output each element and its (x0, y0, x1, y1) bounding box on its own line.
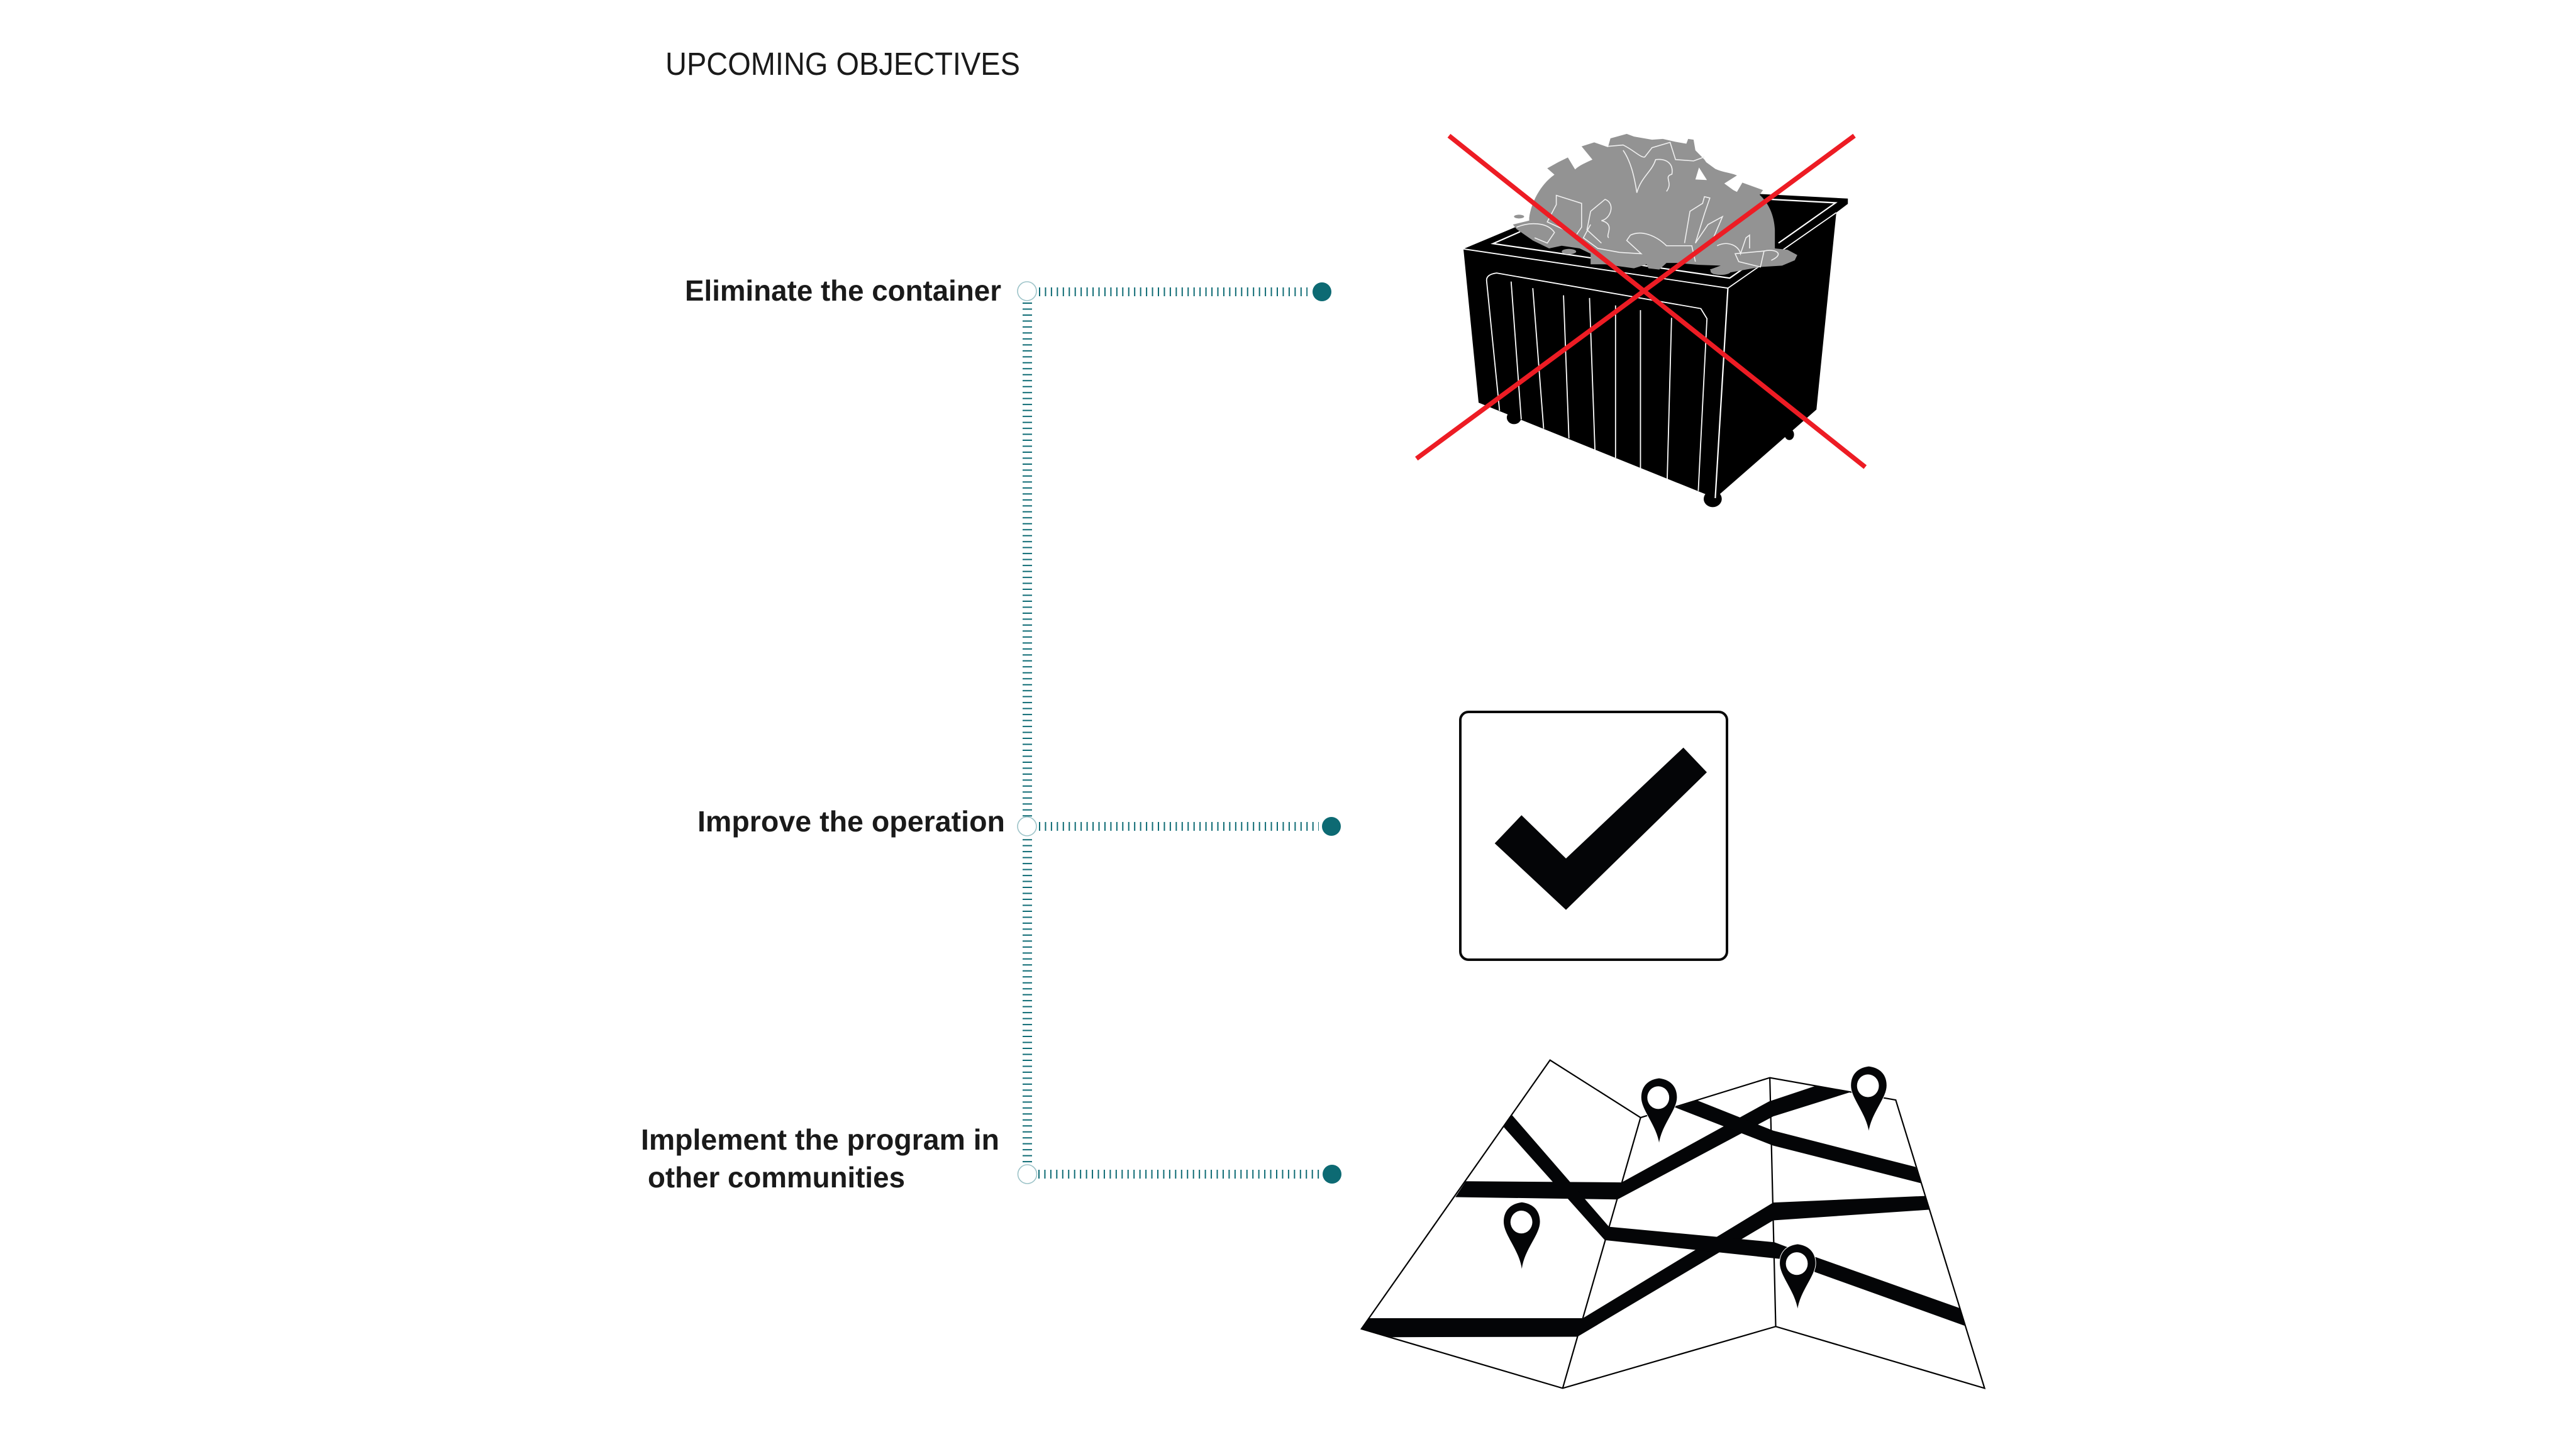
map pin 4 (1780, 1244, 1816, 1311)
container white outlines (1463, 199, 1836, 498)
container wheels (1507, 411, 1794, 507)
row 1 connector (1018, 282, 1331, 301)
check mark (1495, 748, 1707, 910)
icon: crossed-out waste container (1416, 134, 1865, 507)
icon: folded map with pins (1362, 1060, 1985, 1388)
label: improve the operation: Improve the operation (697, 805, 1005, 838)
row 2 connector (1018, 817, 1341, 836)
box outline (1460, 712, 1727, 960)
label: eliminate the container: Eliminate the container (685, 274, 1001, 307)
container body (1463, 194, 1848, 498)
timeline connectors (1018, 282, 1341, 1184)
icon: check mark box (1460, 712, 1727, 960)
map pin 2 (1851, 1066, 1887, 1133)
map pin 3 (1504, 1202, 1540, 1269)
label: implement the program in other communities (641, 1123, 999, 1194)
label: implement the program in other communities: Implement the program in (641, 1123, 999, 1156)
map pin 1 (1641, 1078, 1677, 1145)
map sheet outline (1362, 1060, 1985, 1388)
red cross (1416, 136, 1865, 467)
title: UPCOMING OBJECTIVES (665, 46, 1020, 82)
map roads (1362, 1086, 1965, 1337)
row 3 connector (1018, 1165, 1341, 1184)
vertical dashed spine (1023, 303, 1032, 1163)
label: implement the program in other communities: other communities (648, 1161, 905, 1194)
pile of waste (1513, 134, 1797, 275)
